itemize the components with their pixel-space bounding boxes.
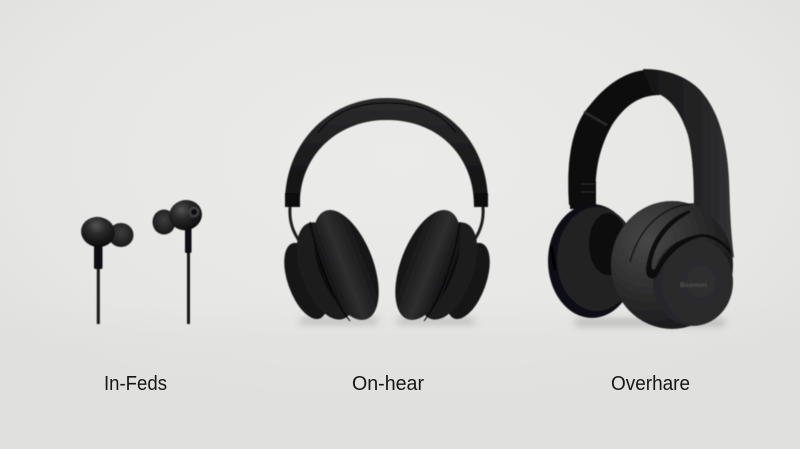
rear headband — [568, 70, 660, 205]
on-ear headphones — [275, 98, 499, 329]
right ear cup — [382, 201, 499, 329]
curved slot — [646, 210, 731, 279]
front ear cup — [611, 201, 733, 329]
left ear cup — [275, 201, 392, 329]
back cushion — [548, 204, 637, 318]
floor shadow — [575, 320, 725, 325]
label: over-ear: Overhare — [611, 373, 690, 395]
left earbud — [79, 214, 134, 324]
front headband — [643, 69, 734, 258]
right earbud — [152, 196, 205, 324]
label: on-ear: On-hear — [352, 373, 424, 395]
floor shadow — [300, 319, 475, 323]
headband — [285, 98, 488, 205]
in-ear earbuds — [79, 196, 205, 324]
hinge — [570, 181, 596, 209]
label: in-ear: In-Feds — [104, 373, 167, 395]
over-ear headphones — [548, 69, 734, 329]
logo plate — [653, 238, 733, 326]
hinge sliders — [285, 193, 300, 207]
logo: Bsemm — [680, 282, 707, 289]
